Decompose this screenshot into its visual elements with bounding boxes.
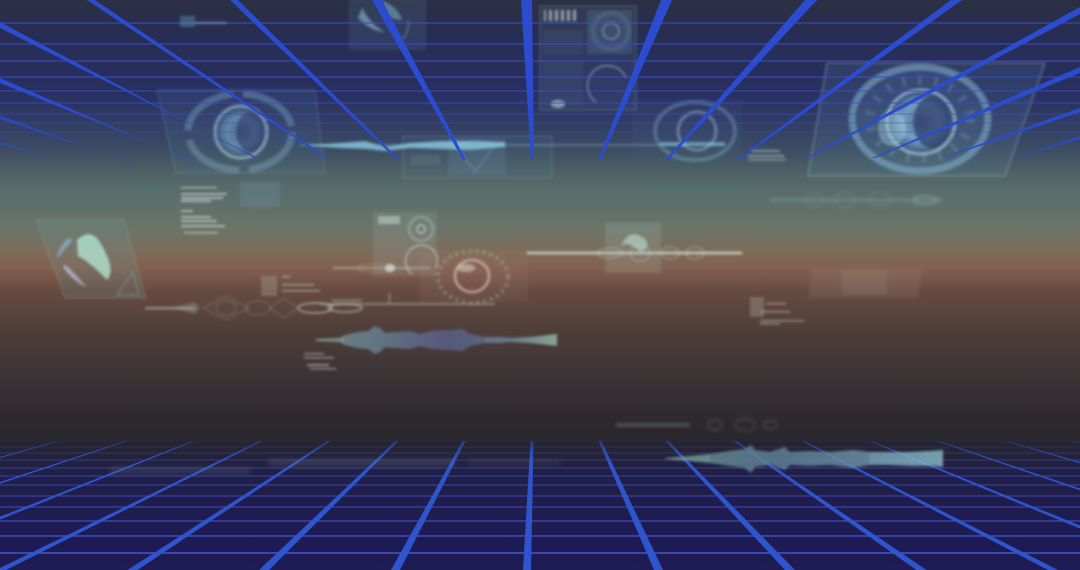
floor fade at horizon bbox=[0, 436, 1080, 466]
panel: left globe bbox=[36, 220, 146, 298]
panel: top planet bbox=[350, 0, 425, 49]
ceiling grid bbox=[0, 0, 1080, 163]
waveform: central chain bbox=[527, 245, 742, 261]
panel: top-right dashboard bbox=[540, 6, 636, 110]
panel: left eye scanner bbox=[157, 90, 325, 173]
panel: small globe bbox=[605, 222, 661, 273]
waveform: blue audio bbox=[665, 445, 943, 473]
ceiling tint bbox=[0, 0, 1080, 175]
code snippet: lower bbox=[304, 353, 336, 370]
code snippet: right bbox=[750, 297, 804, 324]
panel: center lower heart bbox=[403, 136, 552, 178]
panel: small dashboard bbox=[373, 212, 438, 276]
waveform: faint chain bbox=[616, 419, 777, 431]
waveform: faint floor left bbox=[110, 460, 561, 473]
waveform: chain upper right bbox=[770, 192, 943, 208]
waveform: bright cyan upper bbox=[300, 141, 725, 151]
floor perspective lines bbox=[0, 441, 1080, 570]
waveform: purple audio bbox=[316, 326, 557, 354]
panel: mid gauge bbox=[632, 100, 742, 162]
panel: faint right bbox=[808, 268, 922, 298]
ceiling perspective lines bbox=[0, 0, 1080, 163]
waveform: lower left chain bbox=[145, 293, 495, 320]
code snippet: upper right bbox=[748, 150, 786, 160]
waveform: chain through small dashboard bbox=[333, 264, 430, 272]
panel: right large eye scanner bbox=[808, 63, 1045, 176]
code snippet: center bbox=[261, 276, 320, 296]
floor tint bbox=[0, 436, 1080, 570]
floor horizontal lines bbox=[0, 441, 1080, 553]
ceiling horizontal lines bbox=[0, 23, 1080, 140]
panel: lower eye scanner bbox=[420, 250, 528, 303]
code snippet: left column bbox=[181, 182, 280, 234]
code snippet: top bbox=[180, 16, 227, 27]
floor grid bbox=[0, 441, 1080, 570]
